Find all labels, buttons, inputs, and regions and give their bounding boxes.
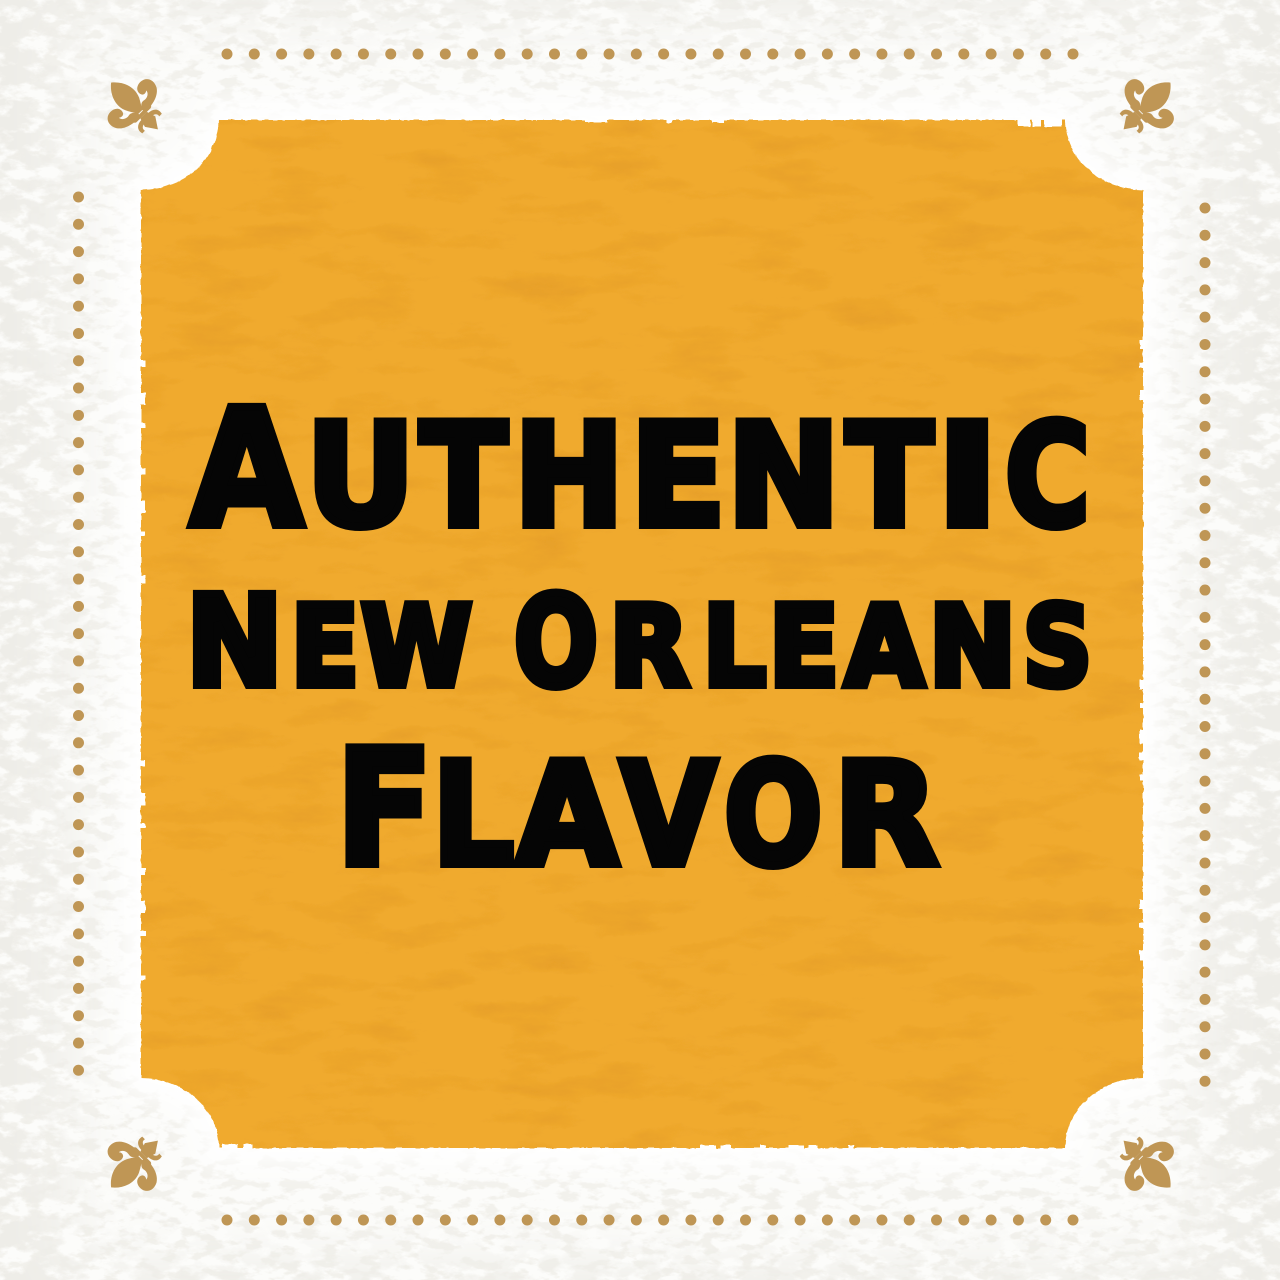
- title line 1: E: [630, 394, 726, 559]
- title line 1: C: [1005, 394, 1090, 559]
- title line 2: O: [514, 570, 598, 715]
- dotted border: right: [1200, 208, 1210, 1083]
- title line 1: U: [306, 394, 415, 559]
- title line 1: I: [936, 394, 999, 559]
- icon: fleur-de-lis top left: [90, 61, 179, 151]
- title line 1: N: [727, 394, 840, 559]
- title line 1: A: [190, 376, 304, 564]
- icon: fleur-de-lis bottom left: [90, 1119, 179, 1209]
- title line 3: L: [432, 733, 514, 898]
- title line 1: T: [846, 394, 933, 559]
- title line 2: A: [845, 583, 924, 712]
- icon: fleur-de-lis top right: [1102, 61, 1192, 151]
- title line 2: E: [291, 583, 359, 712]
- title line 2: S: [1023, 583, 1092, 712]
- title line 2: R: [610, 583, 689, 712]
- dotted border: top: [227, 48, 1075, 60]
- panel: mustard label with notched corners: [141, 120, 1143, 1148]
- title line 1: H: [514, 394, 624, 559]
- title line 3: F: [336, 715, 433, 902]
- title line 2: N: [186, 570, 283, 715]
- title line 3: A: [516, 733, 618, 898]
- title line 3: R: [834, 733, 938, 898]
- icon: fleur-de-lis bottom right: [1102, 1119, 1192, 1209]
- title line 3: O: [724, 733, 822, 898]
- title line 3: V: [620, 733, 717, 898]
- title line 2: E: [769, 583, 839, 712]
- title line 2: W: [361, 583, 472, 712]
- title: Authentic New Orleans Flavor: [186, 376, 1092, 902]
- dotted border: bottom: [227, 1214, 1075, 1226]
- title line 2: L: [703, 583, 766, 712]
- title line 2: N: [929, 583, 1016, 712]
- dotted border: left: [73, 197, 84, 1072]
- title line 1: T: [420, 394, 507, 559]
